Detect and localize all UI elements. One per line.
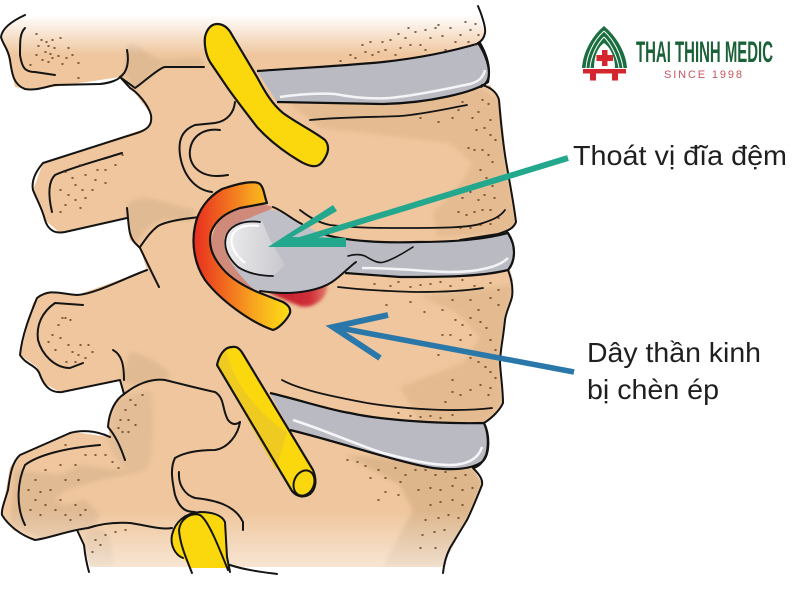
bone speckles [28,22,499,552]
spine body [0,15,516,567]
inflamed nerve arch [193,182,290,330]
disc: middle [320,233,514,277]
arrow: teal, pointing to herniated disc [268,158,568,247]
label: compressed nerve: bị chèn ép [587,374,719,405]
upper yellow nerve [205,24,328,166]
lower yellow nerve [217,347,318,499]
disc: lower [270,393,488,469]
inflammation: red bleed [270,284,327,307]
disc crack [348,247,413,263]
label: compressed nerve: Dây thần kinh [587,337,761,368]
logo icon: green arch with red cross [582,26,627,80]
spine outlines [1,6,516,574]
disc: upper [257,43,489,104]
logo tagline: SINCE 1998 [664,69,742,81]
logo: Thai Thinh Medic [582,26,773,81]
herniated disc bulge [211,205,413,294]
label: herniated disc: Thoát vị đĩa đệm [573,140,787,171]
bottom yellow nerve [172,512,230,573]
arrow: blue, pointing to compressed nerve [333,315,574,372]
